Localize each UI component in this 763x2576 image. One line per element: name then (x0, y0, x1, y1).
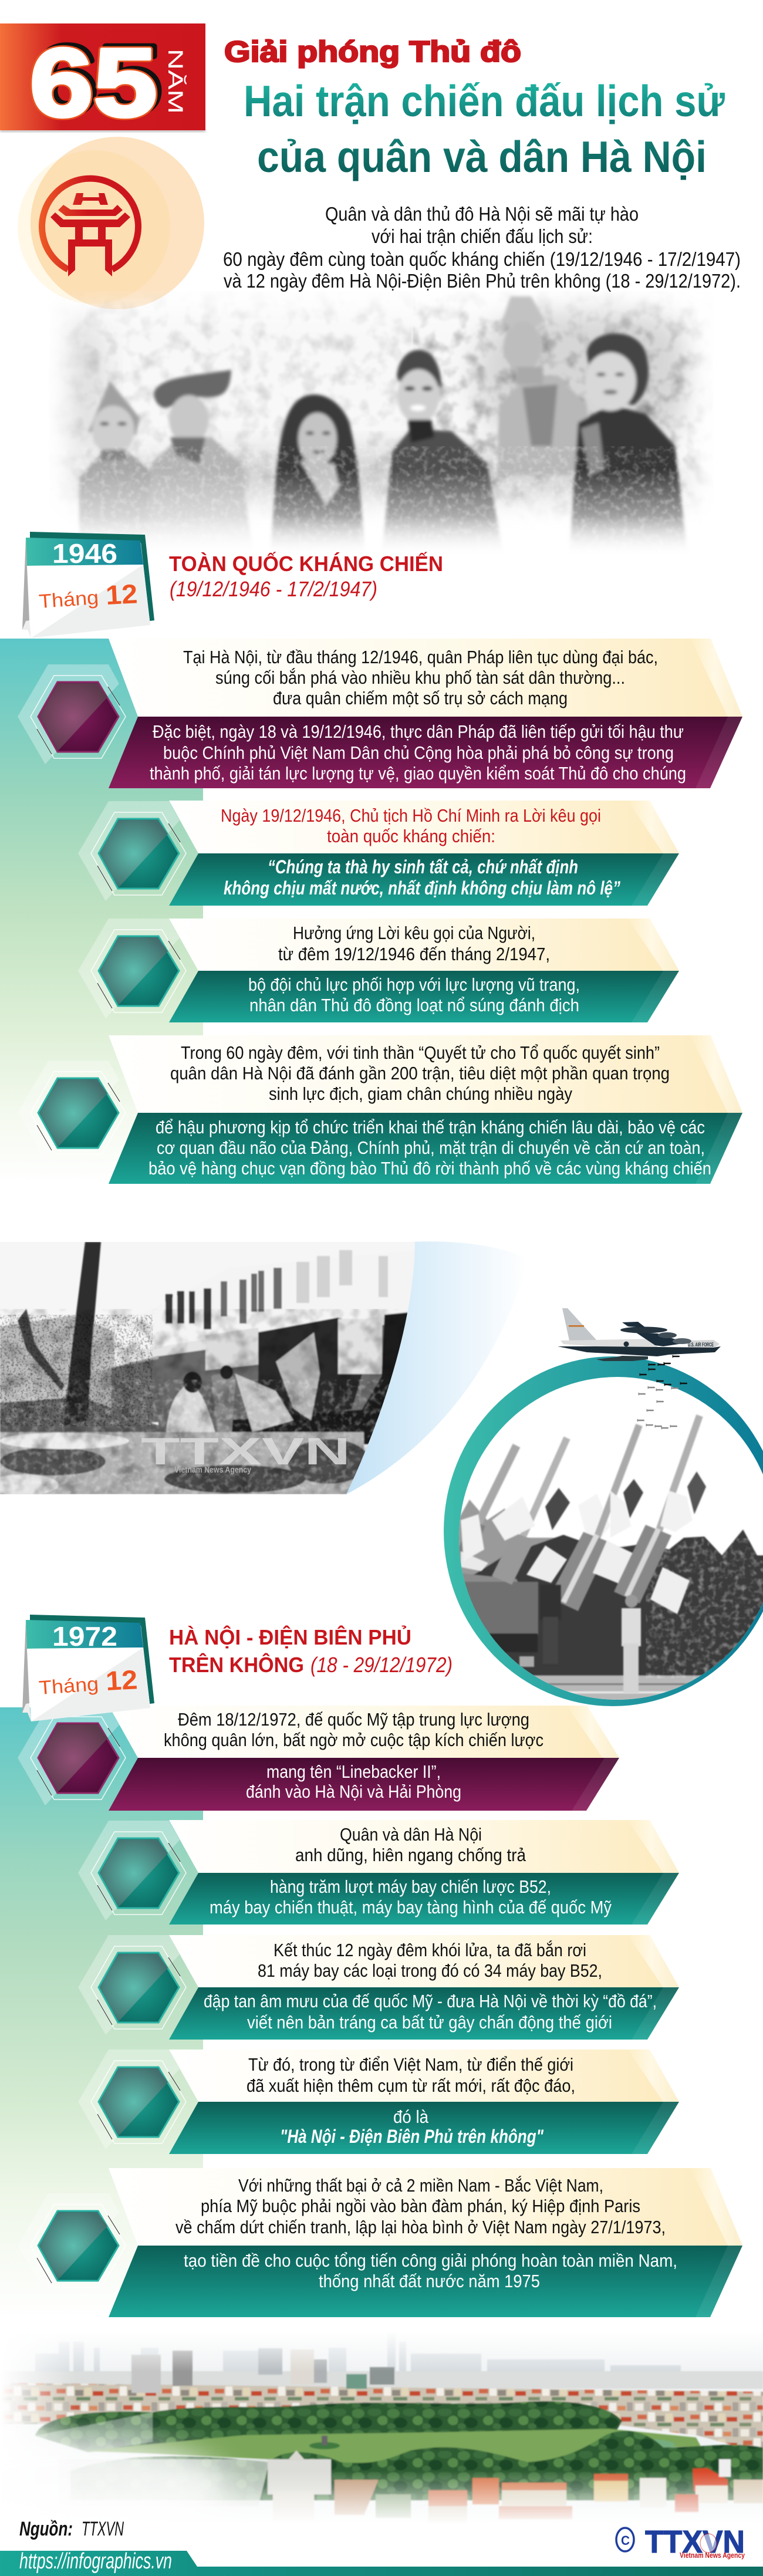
icon: hexagon (78, 1935, 186, 2035)
figure 4 (382, 350, 504, 558)
text: lower: hàng trăm lượt máy bay chiến lược B52, (270, 1876, 551, 1897)
text: upper: đã xuất hiện thêm cụm từ rất mới, rất độc đáo, (247, 2075, 575, 2096)
text: upper: súng cối bắn phá vào nhiều khu phố tàn sát dân thường... (215, 667, 625, 688)
panel: card 1972-4 (78, 2050, 679, 2154)
text: upper: sinh lực địch, giam chân chúng nhiều ngày (269, 1083, 572, 1104)
text: upper: Kết thúc 12 ngày đêm khói lửa, ta đã bắn rơi (274, 1940, 586, 1960)
icon: calendar 1972: 1972 (52, 1621, 117, 1652)
watermark: TTXVN (141, 1430, 350, 1473)
panel: card 1946-3 (78, 919, 679, 1022)
text: lower (184, 2250, 677, 2291)
panel: card 1946-4 (18, 1035, 742, 1184)
icon: hexagon (18, 2193, 126, 2293)
heading: Hà Nội - Điện Biên Phủ trên không (169, 1625, 453, 1677)
text: upper: từ đêm 19/12/1946 đến tháng 2/1947, (278, 944, 550, 964)
text: upper (221, 805, 601, 846)
main title (244, 76, 725, 181)
text: lower: đó là (393, 2106, 429, 2127)
banner: 65 năm: 65 (29, 29, 157, 137)
text: lower (248, 974, 580, 1015)
text: lower: đập tan âm mưu của đế quốc Mỹ - đưa Hà Nội về thời kỳ “đồ đá”, (204, 1991, 657, 2011)
heading: Toàn quốc kháng chiến (169, 551, 443, 601)
icon: calendar 1946: 1946 (52, 538, 117, 569)
heading: Hà Nội - Điện Biên Phủ trên không: (18 - 29/12/1972) (310, 1653, 453, 1677)
icon: hexagon (18, 1706, 126, 1805)
text: lower: buộc Chính phủ Việt Nam Dân chủ Cộng hòa phải phá bỏ công sự trong (163, 742, 674, 763)
icon: calendar 1946: 12 (105, 578, 138, 610)
text: upper: toàn quốc kháng chiến: (327, 826, 495, 846)
watermark: Vietnam News Agency (174, 1465, 252, 1475)
panel: card 1972-3 (78, 1935, 679, 2040)
missile 3 (549, 1425, 643, 1611)
intro text: với hai trận chiến đấu lịch sử: (372, 225, 593, 247)
panel: card 1972-5 (18, 2168, 742, 2317)
banner: 65 năm (0, 23, 205, 137)
text: lower (204, 1991, 657, 2033)
text: lower: Đặc biệt, ngày 18 và 19/12/1946, thực dân Pháp đã liên tiếp gửi tối hậu thư (153, 721, 684, 742)
text: upper: phía Mỹ buộc phải ngồi vào bàn đàm phán, ký Hiệp định Paris (201, 2196, 640, 2216)
text: upper (258, 1940, 602, 1981)
text: upper: quân dân Hà Nội đã đánh gần 200 trận, tiêu diệt một phần quan trọng (170, 1063, 670, 1083)
text: lower: bộ đội chủ lực phối hợp với lực lượng vũ trang, (248, 974, 580, 995)
text: upper: Với những thất bại ở cả 2 miền Nam - Bắc Việt Nam, (238, 2175, 603, 2196)
intro text: Quân và dân thủ đô Hà Nội sẽ mãi tự hào (325, 203, 639, 225)
heading: Toàn quốc kháng chiến: (19/12/1946 - 17/2/1947) (170, 577, 377, 601)
icon: hexagon (78, 2050, 186, 2149)
heading: Toàn quốc kháng chiến: TOÀN QUỐC KHÁNG CHIẾN (169, 551, 443, 576)
trees behind lake (35, 2401, 622, 2452)
logo: TTXVN: TTXVN (645, 2524, 745, 2560)
banner: 65 năm: 65 (29, 29, 157, 137)
figures (540, 1585, 641, 1693)
text: upper: Từ đó, trong từ điển Việt Nam, từ điển thế giới (248, 2054, 573, 2075)
text: lower (246, 1761, 461, 1802)
text: lower: viết nên bản tráng ca bất tử gây chấn động thế giới (247, 2012, 612, 2033)
decorative: blue page curl (346, 1241, 528, 1494)
far skyline (35, 2333, 681, 2380)
mid city band (0, 2383, 763, 2453)
text: lower: thống nhất đất nước năm 1975 (319, 2271, 540, 2291)
panel: gradient band 1972 (0, 1707, 203, 2318)
text: lower: tạo tiền đề cho cuộc tổng tiến công giải phóng hoàn toàn miền Nam, (184, 2250, 677, 2271)
figure 1 (77, 380, 153, 536)
photo: missiles in arch (458, 1416, 763, 1705)
icon: calendar 1946 (22, 532, 154, 638)
source credit: TTXVN (82, 2518, 124, 2540)
text: upper (278, 923, 550, 964)
heading: Hà Nội - Điện Biên Phủ trên không: TRÊN KHÔNG (169, 1652, 304, 1677)
logo: TTXVN: Vietnam News Agency (680, 2551, 745, 2560)
text: upper: Ngày 19/12/1946, Chủ tịch Hồ Chí Minh ra Lời kêu gọi (221, 805, 601, 826)
text: lower: máy bay chiến thuật, máy bay tàng hình của đế quốc Mỹ (210, 1897, 612, 1917)
text: upper: Đêm 18/12/1972, đế quốc Mỹ tập trung lực lượng (178, 1709, 529, 1730)
text: upper (247, 2054, 575, 2096)
logo: TTXVN: C (621, 2533, 630, 2548)
text: lower (150, 721, 686, 784)
decorative: teal arch frame (444, 1356, 763, 1706)
banner: 65 năm: 65 (33, 26, 161, 134)
lake (83, 2429, 701, 2472)
text: upper: không quân lớn, bất ngờ mở cuộc tập kích chiến lược (164, 1730, 543, 1750)
panel: card 1946-2 (78, 801, 679, 906)
icon: calendar 1972 (22, 1615, 154, 1721)
icon: Hanoi emblem (18, 137, 204, 309)
text: quote (224, 856, 620, 899)
text: lower: nhân dân Thủ đô đồng loạt nổ súng đánh địch (249, 995, 579, 1015)
footer bar with url (0, 2549, 763, 2576)
text: lower (148, 1117, 711, 1179)
text: quote: không chịu mất nước, nhất định không chịu làm nô lệ” (224, 877, 620, 899)
text: upper: đưa quân chiếm một số trụ sở cách mạng (273, 688, 568, 708)
source credit (19, 2518, 124, 2540)
text: upper (170, 1042, 670, 1104)
text: lower (210, 1876, 612, 1917)
icon: B-52 bomber with bombs: U.S. AIR FORCE (688, 1342, 714, 1348)
text: lower: đánh vào Hà Nội và Hải Phòng (246, 1781, 461, 1802)
text: upper (164, 1709, 543, 1750)
photo: bombed Hanoi street (0, 1242, 417, 1495)
photo: Hanoi city and Hoan Kiem lake (0, 2330, 763, 2541)
figure 6 (569, 333, 688, 558)
figure 5 (498, 296, 593, 475)
footer bar with url: https://infographics.vn (19, 2549, 172, 2574)
source credit: Nguồn: (19, 2518, 73, 2540)
icon: calendar 1972: 12 (105, 1664, 138, 1696)
trees front (70, 2431, 763, 2500)
text: lower: để hậu phương kịp tổ chức triển khai thế trận kháng chiến lâu dài, bảo vệ các (156, 1117, 705, 1137)
panel: card 1972-1 (18, 1706, 619, 1811)
text: upper: Hưởng ứng Lời kêu gọi của Người, (293, 923, 535, 943)
icon: hexagon (18, 664, 126, 764)
photo: soldiers and women of Hanoi (47, 288, 713, 558)
icon: calendar 1946: Tháng (38, 586, 99, 612)
text: lower (280, 2106, 544, 2147)
icon: hexagon (78, 801, 186, 901)
text: upper: 81 máy bay các loại trong đó có 34 máy bay B52, (258, 1960, 602, 1981)
text: upper: Trong 60 ngày đêm, với tinh thần “Quyết tử cho Tổ quốc quyết sinh” (181, 1042, 660, 1063)
panel: gradient band 1946 (0, 639, 203, 1184)
text: upper: anh dũng, hiên ngang chống trả (295, 1845, 526, 1865)
text: lower: mang tên “Linebacker II”, (266, 1761, 441, 1782)
missile 1 (461, 1446, 516, 1571)
icon: B-52 bomber with bombs (558, 1308, 721, 1429)
icon: hexagon (78, 1821, 186, 1920)
text: upper (175, 2175, 666, 2237)
front buildings (268, 2450, 763, 2523)
text: lower: thành phố, giải tán lực lượng tự vệ, giao quyền kiểm soát Thủ đô cho chúng (150, 763, 686, 784)
icon: hexagon (18, 1061, 126, 1160)
heading: Hà Nội - Điện Biên Phủ trên không: HÀ NỘI - ĐIỆN BIÊN PHỦ (169, 1625, 411, 1649)
icon: hexagon (78, 919, 186, 1018)
text: lower: "Hà Nội - Điện Biên Phủ trên không" (280, 2126, 544, 2147)
figure 2 (146, 370, 254, 558)
heading: Giải phóng Thủ đô: Giải phóng Thủ đô (224, 35, 521, 68)
watermark (141, 1438, 346, 1474)
text: quote: “Chúng ta thà hy sinh tất cả, chứ nhất định (268, 856, 578, 877)
panel: card 1972-2 (78, 1820, 679, 1925)
text: upper: về chấm dứt chiến tranh, lập lại hòa bình ở Việt Nam ngày 27/1/1973, (175, 2217, 666, 2237)
text: upper (295, 1824, 526, 1865)
towers (131, 2348, 394, 2393)
missile 2 (492, 1438, 570, 1585)
text: upper (183, 647, 658, 708)
text: upper: Tại Hà Nội, từ đầu tháng 12/1946, quân Pháp liên tục dùng đại bác, (183, 647, 658, 667)
banner: 65 năm: NĂM (164, 49, 187, 114)
figure 3 (270, 394, 365, 558)
panel: card 1946-1 (18, 639, 742, 788)
main title: của quân và dân Hà Nội (257, 132, 707, 181)
icon: calendar 1972: Tháng (38, 1673, 99, 1699)
intro text (223, 203, 741, 292)
text: upper: Quân và dân Hà Nội (340, 1824, 482, 1845)
missile 4 (614, 1416, 706, 1614)
truck (458, 1573, 538, 1667)
